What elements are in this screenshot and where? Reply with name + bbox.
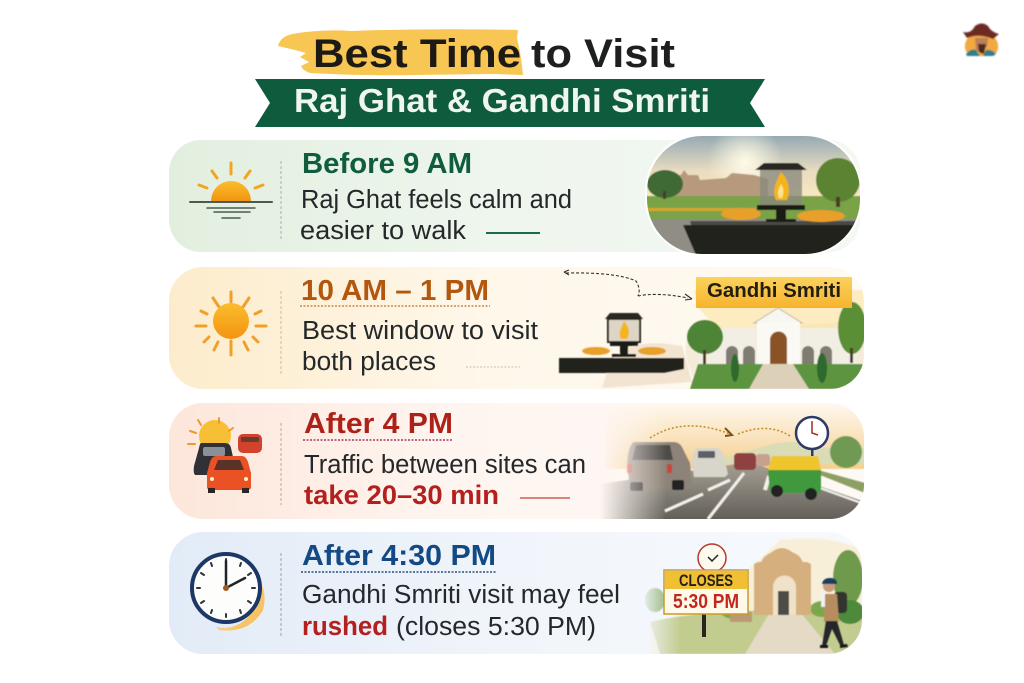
sign: closes 5:30 PM: CLOSES [679,571,733,590]
label: Gandhi Smriti: Gandhi Smriti [707,280,841,302]
panel: after 4:30 PM [169,532,864,654]
heading: Before 9 AM [302,148,472,180]
divider [280,161,282,239]
accent line [466,366,520,368]
title: Best Time to Visit [278,29,675,76]
divider [280,291,282,375]
illustration: India Gate and closing sign [645,538,864,654]
body text: both places [302,348,436,376]
icon: traffic and sun [188,418,262,493]
icon: walking visitor [820,578,848,648]
heading underline [301,571,497,573]
heading: After 4 PM [304,408,453,440]
closing time text: (closes 5:30 PM) [396,613,596,641]
icon: sunrise [190,163,272,218]
divider [280,423,282,505]
emphasis word: rushed [302,611,388,641]
icon: sun [196,292,266,355]
label: Gandhi Smriti [696,277,852,308]
icon: clock above sign [698,544,726,572]
heading underline [300,305,490,307]
body text: Traffic between sites can [304,451,586,479]
body text: Best window to visit [302,317,538,345]
illustration: Gandhi Smriti building [686,290,866,389]
body text: easier to walk [300,217,466,245]
banner text: Raj Ghat & Gandhi Smriti [294,82,710,119]
panel: before 9 AM [169,136,860,254]
ribbon banner [255,79,765,127]
sign: closes 5:30 PM [664,570,748,637]
panel: 10 AM to 1 PM [169,267,866,389]
logo badge [963,24,999,56]
accent line [486,232,540,234]
brush highlight [278,29,523,75]
illustration: flame on platform [559,313,692,388]
emphasis text: take 20–30 min [304,480,499,510]
divider [280,553,282,637]
heading plain words: to Visit [531,32,675,76]
heading: After 4:30 PM [302,540,496,572]
heading underline [303,439,453,441]
illustration: road traffic [600,403,867,522]
heading highlighted words: Best Time [313,32,521,76]
body text: Gandhi Smriti visit may feel [302,581,620,609]
body text: Raj Ghat feels calm and [301,186,572,214]
accent line [520,497,570,499]
icon: clock on pole [796,417,828,456]
panel: after 4 PM [169,403,867,522]
arrow: traffic route [650,426,790,438]
sign: closes 5:30 PM: 5:30 PM [673,591,739,613]
arrow: route between sites [564,270,692,300]
heading: 10 AM – 1 PM [301,275,489,307]
illustration: flame memorial [647,136,860,254]
icon: clock [192,554,265,631]
